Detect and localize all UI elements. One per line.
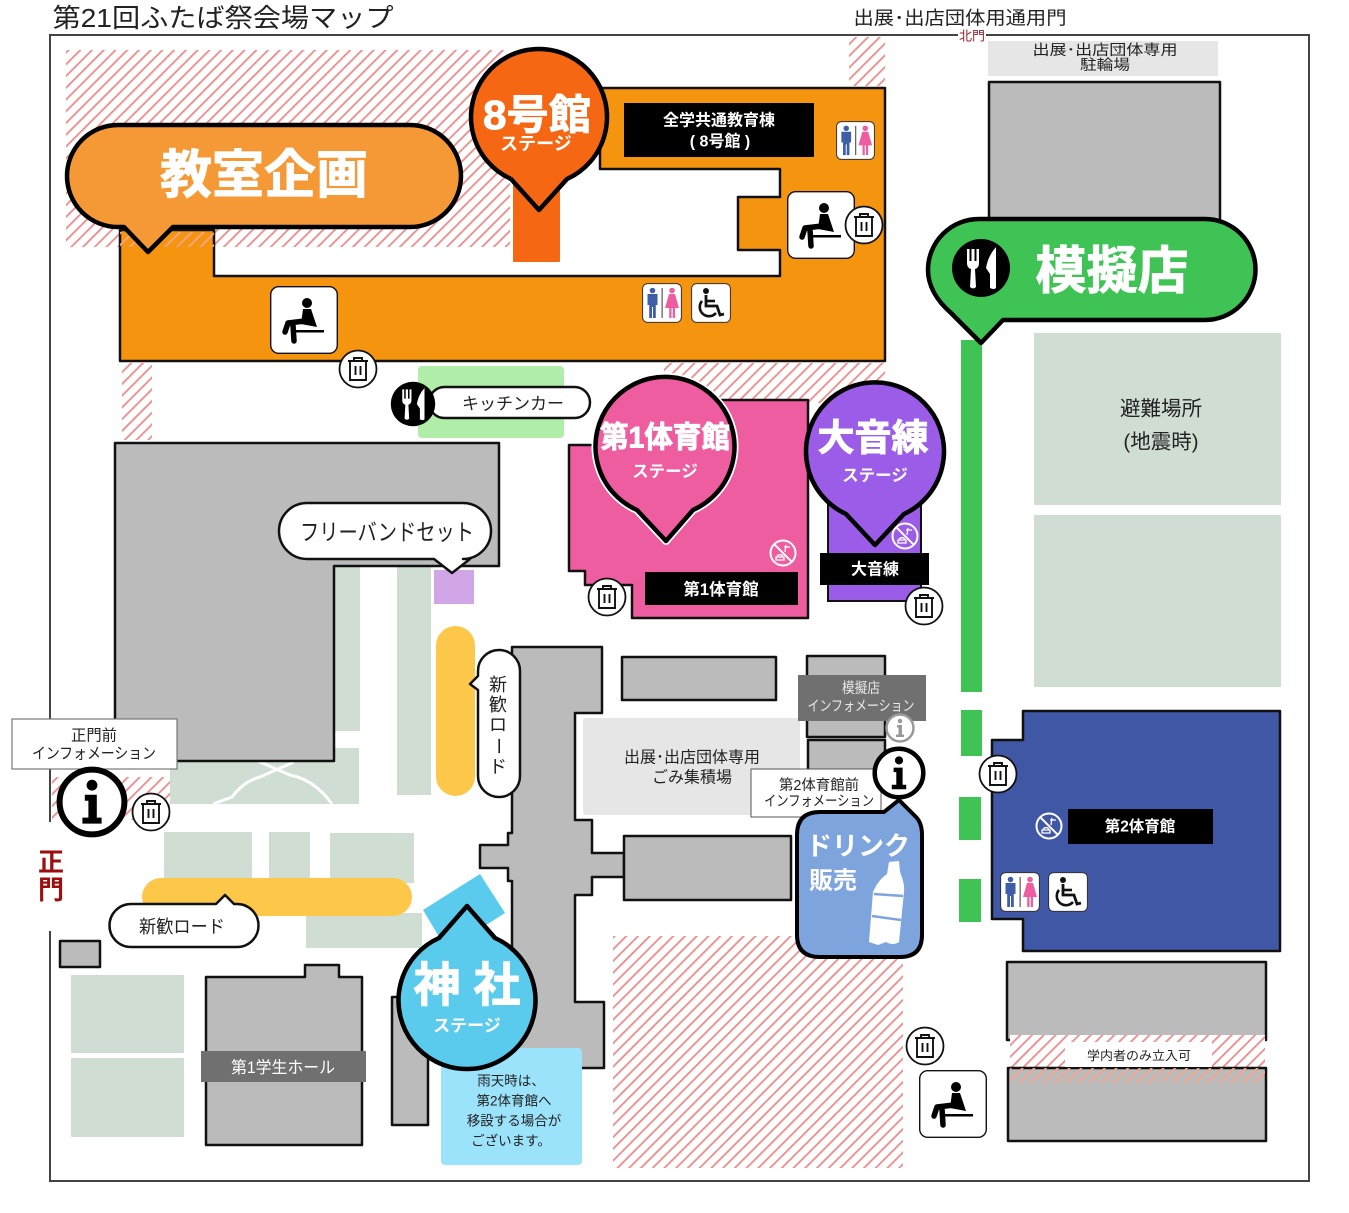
第2体育館前 information: 第2体育館前 bbox=[779, 777, 859, 794]
building: west grey bbox=[115, 443, 499, 761]
正門前 information: 正門前 bbox=[71, 726, 117, 744]
pin: 神社ステージ bbox=[398, 906, 536, 1069]
label: 全学共通教育棟: 全学共通教育棟 bbox=[663, 110, 775, 130]
rain notice: 雨天時は、 bbox=[477, 1074, 545, 1088]
building: 第1体育館 bbox=[569, 400, 808, 618]
pin: 8号館ステージ: ステージ bbox=[500, 134, 572, 154]
callout: vertical shinkan road: ド bbox=[489, 757, 507, 777]
buildings: south-east bbox=[1007, 962, 1266, 1141]
icon: info 第2体育館前 bbox=[875, 749, 923, 797]
callout: drink sales: ドリンク bbox=[806, 831, 910, 861]
rain notice: 第2体育館へ bbox=[476, 1092, 552, 1108]
evacuation area label bbox=[1120, 398, 1202, 454]
pin: 神社ステージ: ステージ bbox=[433, 1016, 501, 1036]
mogiten information: インフォメーション bbox=[808, 699, 914, 715]
area: free band set bbox=[434, 570, 474, 604]
callout: vertical shinkan road: ロ bbox=[489, 715, 507, 735]
callout: vertical shinkan road: 新 bbox=[489, 675, 507, 695]
north gate label: 北門 bbox=[959, 28, 985, 44]
building: 第2体育館: 第2体育館 bbox=[1105, 816, 1175, 836]
building: 第1体育館: 第1体育館 bbox=[683, 579, 759, 599]
title: 第21回ふたば祭会場マップ bbox=[52, 3, 394, 33]
callout: vertical shinkan road bbox=[470, 650, 520, 797]
callout: 模擬店: 模擬店 bbox=[1035, 242, 1189, 300]
building: central grey bbox=[480, 647, 791, 1068]
pin: 大音練ステージ bbox=[806, 382, 944, 545]
mogiten information bbox=[798, 675, 926, 742]
buildings: south-east: 学内者のみ立入可 bbox=[1087, 1048, 1191, 1063]
kitchen car area: キッチンカー bbox=[462, 394, 564, 414]
main gate label: 正 bbox=[38, 847, 64, 877]
building: narrow grey bbox=[392, 997, 428, 1125]
mogiten information: 模擬店 bbox=[842, 680, 880, 697]
pin: 8号館ステージ bbox=[471, 49, 607, 210]
callout: free band set bbox=[279, 503, 491, 573]
pin: 大音練ステージ: 大音練 bbox=[818, 418, 928, 458]
icon: bottle bbox=[869, 861, 904, 945]
第2体育館前 information: インフォメーション bbox=[764, 794, 874, 810]
icon: info 正門前 bbox=[60, 770, 124, 834]
rain notice bbox=[441, 1048, 582, 1165]
garbage area: ごみ集積場 bbox=[652, 768, 732, 786]
green food stall strips bbox=[959, 340, 982, 922]
bicycle parking label: 出展･出店団体専用 bbox=[1032, 42, 1178, 59]
pin: 第1体育館ステージ: ステージ bbox=[632, 463, 698, 481]
bicycle parking label: 駐輪場 bbox=[1080, 57, 1130, 74]
building: 大音練: 大音練 bbox=[851, 560, 899, 578]
shrine platform bbox=[423, 874, 505, 950]
small grey hut bbox=[60, 941, 100, 967]
pin: 第1体育館ステージ: 第1体育館 bbox=[600, 422, 730, 454]
evacuation area label: 避難場所 bbox=[1120, 398, 1202, 420]
kitchen car area bbox=[391, 366, 590, 438]
evacuation area label: (地震時) bbox=[1123, 430, 1199, 454]
main gate label bbox=[38, 847, 64, 905]
callout: drink sales bbox=[797, 800, 922, 957]
building: student hall bbox=[201, 965, 366, 1145]
building: north grey bbox=[989, 82, 1220, 222]
callout: 教室企画: 教室企画 bbox=[160, 147, 368, 205]
pin: 8号館ステージ: 8号館 bbox=[483, 92, 591, 138]
callout: free band set: フリーバンドセット bbox=[300, 519, 474, 545]
icons: trash bins bbox=[132, 206, 1016, 1064]
rain notice: 移設する場合が bbox=[467, 1114, 562, 1128]
rain notice: ございます。 bbox=[471, 1132, 551, 1148]
garbage area: 出展･出店団体専用 bbox=[624, 748, 760, 766]
callout: vertical shinkan road: ー bbox=[488, 737, 508, 755]
callout: vertical shinkan road: 歓 bbox=[489, 695, 507, 715]
正門前 information bbox=[12, 719, 177, 769]
正門前 information: インフォメーション bbox=[32, 746, 156, 762]
shinkan road bbox=[142, 626, 475, 916]
pin: 神社ステージ: 神 社 bbox=[413, 958, 521, 1012]
building: 8号館 bbox=[120, 88, 885, 361]
green spaces bbox=[71, 333, 1281, 1137]
icon: cutlery bbox=[952, 239, 1010, 297]
callout: 教室企画 bbox=[67, 125, 461, 252]
callout: 模擬店 bbox=[928, 219, 1256, 343]
main gate label: 門 bbox=[38, 875, 64, 905]
pin: 大音練ステージ: ステージ bbox=[842, 467, 908, 485]
callout: horizontal shinkan road: 新歓ロード bbox=[139, 917, 225, 937]
第2体育館前 information bbox=[751, 769, 881, 817]
icons: 8号館 restrooms and accessibility bbox=[643, 122, 874, 322]
bicycle parking label bbox=[988, 41, 1218, 76]
building: 大音練 bbox=[820, 480, 929, 601]
building: 第2体育館 bbox=[992, 711, 1280, 951]
callout: horizontal shinkan road bbox=[110, 895, 258, 947]
label: 全学共通教育棟 bbox=[624, 103, 814, 157]
garbage area bbox=[583, 718, 800, 815]
building: student hall: 第1学生ホール bbox=[231, 1058, 335, 1077]
icons: seating bbox=[271, 192, 986, 1137]
callout: drink sales: 販売 bbox=[809, 868, 857, 894]
small buildings east of centre bbox=[622, 656, 885, 790]
label: 全学共通教育棟: ( 8号館 ) bbox=[690, 132, 750, 150]
pin: 第1体育館ステージ bbox=[596, 377, 735, 541]
north gate heading: 出展･出店団体用通用門 bbox=[854, 8, 1066, 28]
